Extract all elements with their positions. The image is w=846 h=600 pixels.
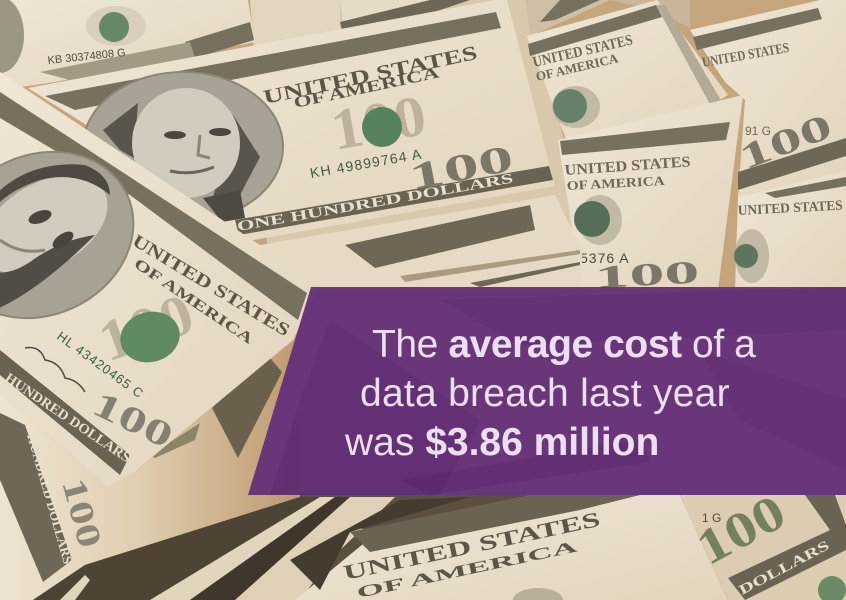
portrait oval bbox=[0, 122, 161, 348]
banknote fan: lower left stripes bbox=[33, 497, 395, 600]
banknote: large left with portrait: HUNDRED DOLLARS bbox=[2, 371, 133, 466]
purple banner bbox=[248, 287, 846, 495]
banknote: centre with portrait: UNITED STATES bbox=[261, 42, 479, 109]
banknote: bottom centre: UNITED STATES bbox=[341, 507, 602, 585]
banknote: centre with portrait bbox=[28, 0, 555, 243]
banknote: bottom right: 1 G bbox=[702, 511, 721, 525]
banknote: bottom right bbox=[680, 483, 846, 600]
banknote: centre with portrait: OF AMERICA bbox=[292, 64, 441, 112]
banknote: front right: 5376 A bbox=[580, 250, 630, 266]
banknote: top right fan: UNITED STATES bbox=[531, 32, 634, 71]
banknote: centre with portrait: 100 bbox=[406, 138, 517, 199]
banknote: right middle: UNITED STATES bbox=[737, 199, 843, 219]
banknote: front right: 100 bbox=[593, 254, 700, 295]
banknote: bottom right: 100 bbox=[687, 483, 794, 576]
portrait oval bbox=[83, 72, 283, 222]
banknote: front right: UNITED STATES bbox=[564, 154, 691, 179]
banknote: large left with portrait bbox=[0, 72, 320, 487]
banknote: centre with portrait: ONE HUNDRED DOLLARS bbox=[236, 171, 515, 235]
banner headline: The average cost of a bbox=[372, 323, 756, 366]
banknote: top left: KB 30374808 G bbox=[47, 47, 126, 67]
banknote: under-note and lower left band: HUNDRED DOLLARS bbox=[24, 432, 76, 566]
banknote: large left with portrait: OF AMERICA bbox=[131, 256, 256, 348]
banknote: far top right: 91 G bbox=[745, 124, 771, 138]
banknote: far top right: UNITED STATES bbox=[701, 41, 791, 71]
banner headline bbox=[344, 323, 756, 464]
banknote: centre with portrait: 100 bbox=[326, 82, 431, 163]
banknote: under-note and lower left band bbox=[0, 340, 300, 600]
banknote: top left bbox=[0, 0, 255, 90]
banknote: large left with portrait: UNITED STATES bbox=[129, 230, 294, 340]
banknote: top right fan bbox=[527, 0, 728, 150]
signature bbox=[25, 348, 85, 392]
banknote: large left with portrait: 100 bbox=[90, 281, 202, 374]
banknote: top right fan: OF AMERICA bbox=[534, 50, 620, 84]
banknote: large left with portrait: HL 43420465 C bbox=[54, 328, 147, 401]
banknote: large left with portrait: 100 bbox=[86, 383, 180, 456]
banknote stack under centre note bbox=[260, 195, 582, 290]
banknote: far top right: 100 bbox=[734, 106, 837, 177]
banknote: front right bbox=[558, 95, 743, 295]
banknote: centre with portrait: KH 49899764 A bbox=[309, 145, 423, 181]
banner headline: data breach last year bbox=[360, 372, 730, 415]
banknote: bottom right: DOLLARS bbox=[737, 538, 832, 599]
banknote: front right: OF AMERICA bbox=[566, 173, 666, 193]
banner headline: was $3.86 million bbox=[344, 421, 659, 464]
banknote: far top right bbox=[690, 0, 846, 197]
banknote: top centre strip bbox=[250, 0, 690, 50]
banknote: under-note and lower left band: 100 bbox=[54, 474, 108, 552]
banknote: right middle bbox=[734, 170, 846, 290]
banknote: bottom centre bbox=[290, 495, 728, 600]
